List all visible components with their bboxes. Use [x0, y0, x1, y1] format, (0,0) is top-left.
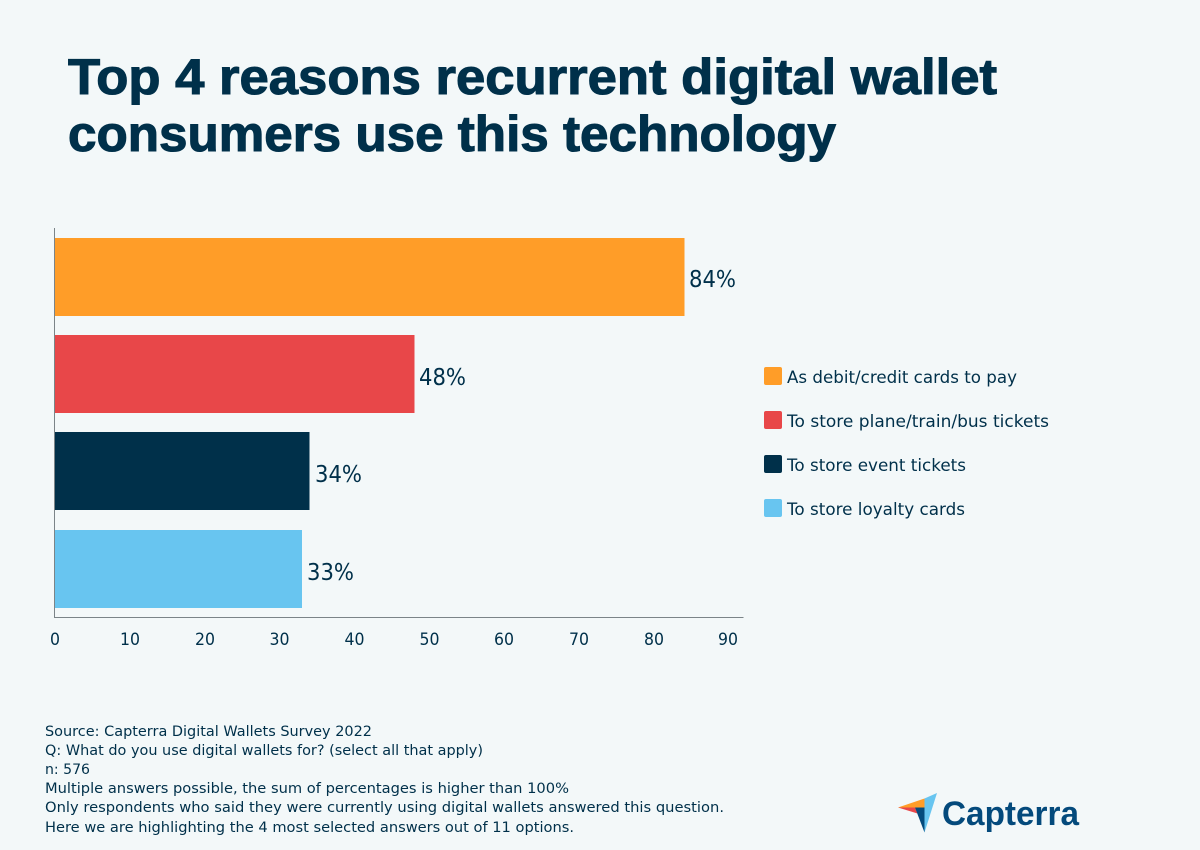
Capterra logo	[898, 793, 1080, 833]
value label 34%: 34%	[315, 462, 362, 488]
source notes: Q: What do you use digital wallets for? (select all that apply)	[45, 743, 483, 759]
icon: Capterra arrow	[898, 793, 937, 832]
axes	[54, 228, 744, 618]
legend item: event tickets: To store event tickets	[786, 456, 966, 476]
x axis tick labels: 50	[420, 630, 440, 649]
legend item: loyalty cards: To store loyalty cards	[786, 500, 965, 520]
bar: loyalty cards 33%	[54, 530, 302, 608]
x axis tick labels: 60	[494, 630, 514, 649]
legend item: plane/train/bus tickets: To store plane/train/bus tickets	[786, 412, 1049, 432]
x axis tick labels: 40	[344, 630, 364, 649]
x axis tick labels: 90	[718, 630, 738, 649]
source notes: Only respondents who said they were currently using digital wallets answered this question.	[45, 800, 724, 816]
x axis tick labels: 80	[644, 630, 664, 649]
wordmark: Capterra	[942, 795, 1080, 833]
value label 48%: 48%	[419, 365, 466, 391]
bar: event tickets 34%	[54, 432, 310, 510]
x axis tick labels	[50, 630, 738, 649]
bar chart	[50, 228, 744, 649]
value label 33%: 33%	[307, 560, 354, 586]
source notes	[45, 724, 724, 836]
title: Top 4 reasons recurrent digital wallet	[68, 49, 997, 105]
legend	[764, 367, 1049, 520]
source notes: Source: Capterra Digital Wallets Survey 2022	[45, 724, 372, 740]
legend item: debit/credit cards: As debit/credit cards to pay	[787, 368, 1017, 388]
source notes: n: 576	[45, 762, 90, 778]
title: consumers use this technology	[68, 106, 836, 162]
bar: as debit/credit cards 84%	[54, 238, 684, 316]
bar: plane/train/bus tickets 48%	[54, 335, 414, 413]
x axis tick labels: 0	[50, 630, 60, 649]
x axis tick labels: 10	[120, 630, 140, 649]
x axis tick labels: 20	[195, 630, 215, 649]
x axis tick labels: 70	[569, 630, 589, 649]
x axis tick labels: 30	[270, 630, 290, 649]
value label 84%: 84%	[689, 267, 736, 293]
source notes: Here we are highlighting the 4 most selected answers out of 11 options.	[45, 820, 574, 836]
source notes: Multiple answers possible, the sum of percentages is higher than 100%	[45, 781, 569, 797]
title	[68, 49, 997, 162]
